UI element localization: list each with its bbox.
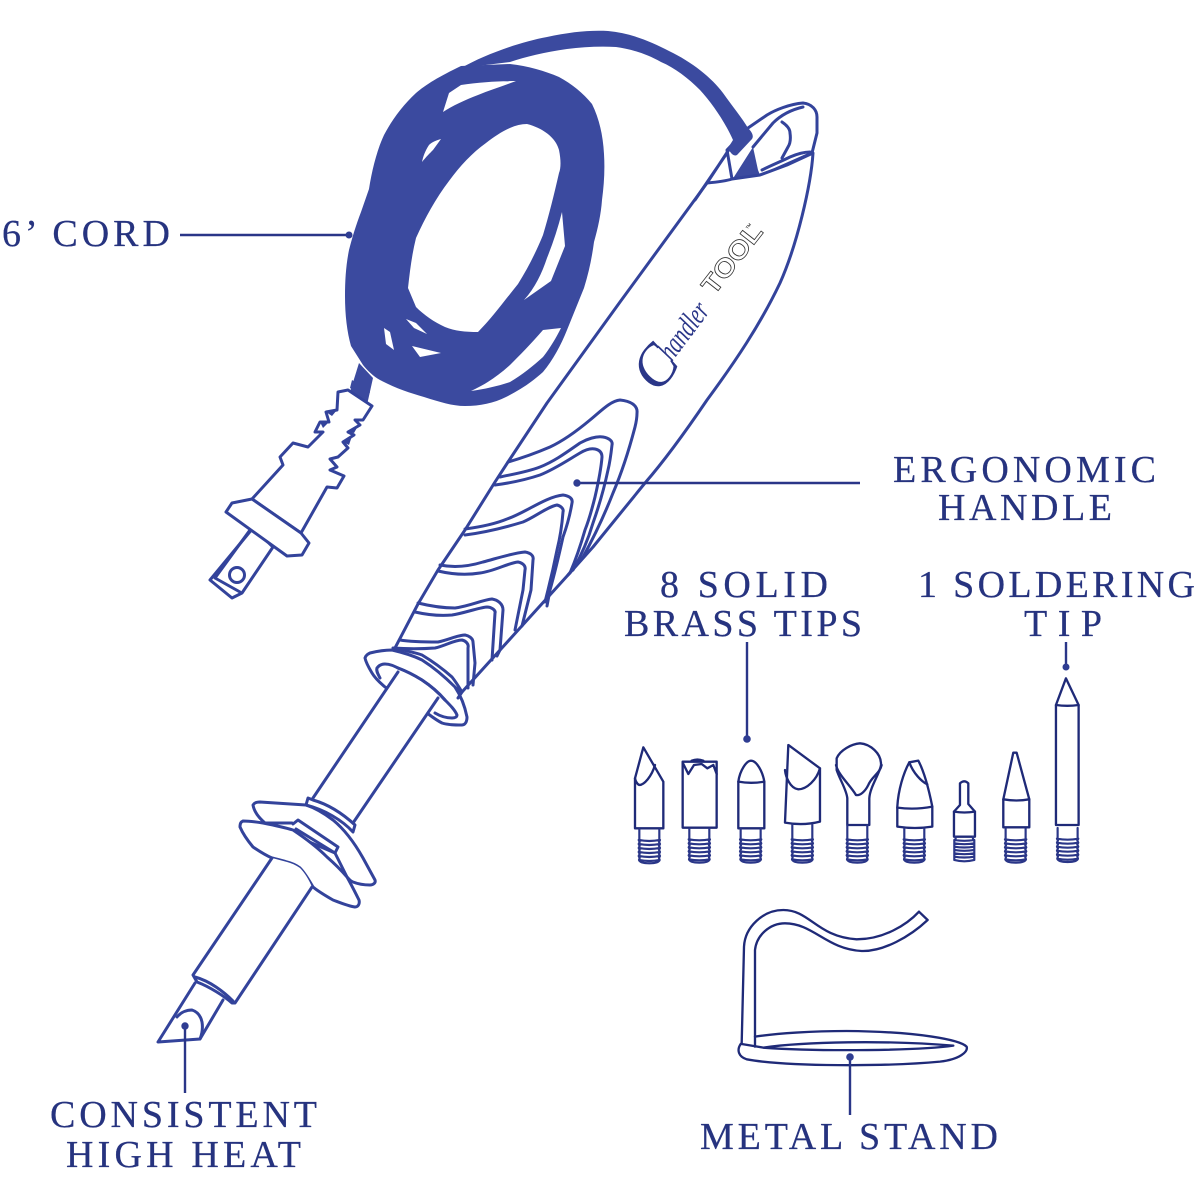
lower shaft and collars	[158, 648, 467, 1042]
tip 8	[1003, 753, 1029, 863]
callout: ergonomic handle	[573, 449, 1156, 529]
callout: metal stand: METAL STAND	[700, 1116, 998, 1158]
tip 4	[785, 745, 820, 863]
cord coil	[345, 31, 753, 406]
collar near handle	[313, 648, 467, 823]
tip 3	[738, 761, 764, 863]
handle body	[393, 148, 813, 692]
callout: 6' cord	[2, 213, 352, 255]
middle flange	[240, 798, 375, 907]
tip 1	[635, 747, 663, 863]
logo: Chandler TOOL: handler	[651, 295, 716, 366]
callout: 1 soldering tip: 1 SOLDERING	[918, 564, 1195, 606]
handle back loop	[727, 103, 817, 180]
logo: Chandler TOOL	[617, 217, 769, 402]
callout: 8 solid brass tips: BRASS TIPS	[624, 603, 862, 645]
callout: 1 soldering tip	[918, 564, 1195, 670]
logo: Chandler TOOL: C	[617, 331, 693, 402]
callout: consistent high heat	[50, 1022, 317, 1176]
icons: nine brass tips	[635, 678, 1079, 863]
illustration: soldering iron with cord	[158, 31, 817, 1042]
callout: 8 solid brass tips: 8 SOLID	[660, 564, 828, 606]
grip chevrons	[393, 400, 637, 688]
tip 9: soldering tip	[1056, 678, 1079, 862]
callout: 1 soldering tip: TIP	[1024, 603, 1102, 645]
tip 6	[897, 761, 932, 863]
iron tip	[158, 983, 223, 1042]
callout: ergonomic handle: ERGONOMIC	[893, 449, 1156, 491]
callout: metal stand	[700, 1053, 998, 1158]
tip 2	[683, 759, 717, 863]
tip 7	[954, 781, 975, 861]
callout: consistent high heat: HIGH HEAT	[66, 1134, 301, 1176]
logo: Chandler TOOL: ™	[745, 222, 755, 232]
callout: 6' cord: 6’ CORD	[2, 213, 170, 255]
icon: metal stand	[739, 910, 967, 1065]
callout: 8 solid brass tips	[624, 564, 862, 743]
lower barrel	[193, 858, 312, 1003]
callout: consistent high heat: CONSISTENT	[50, 1094, 317, 1136]
plug	[210, 380, 372, 598]
callout: ergonomic handle: HANDLE	[938, 487, 1112, 529]
tip 5	[836, 743, 882, 863]
logo: Chandler TOOL: TOOL	[695, 217, 769, 300]
